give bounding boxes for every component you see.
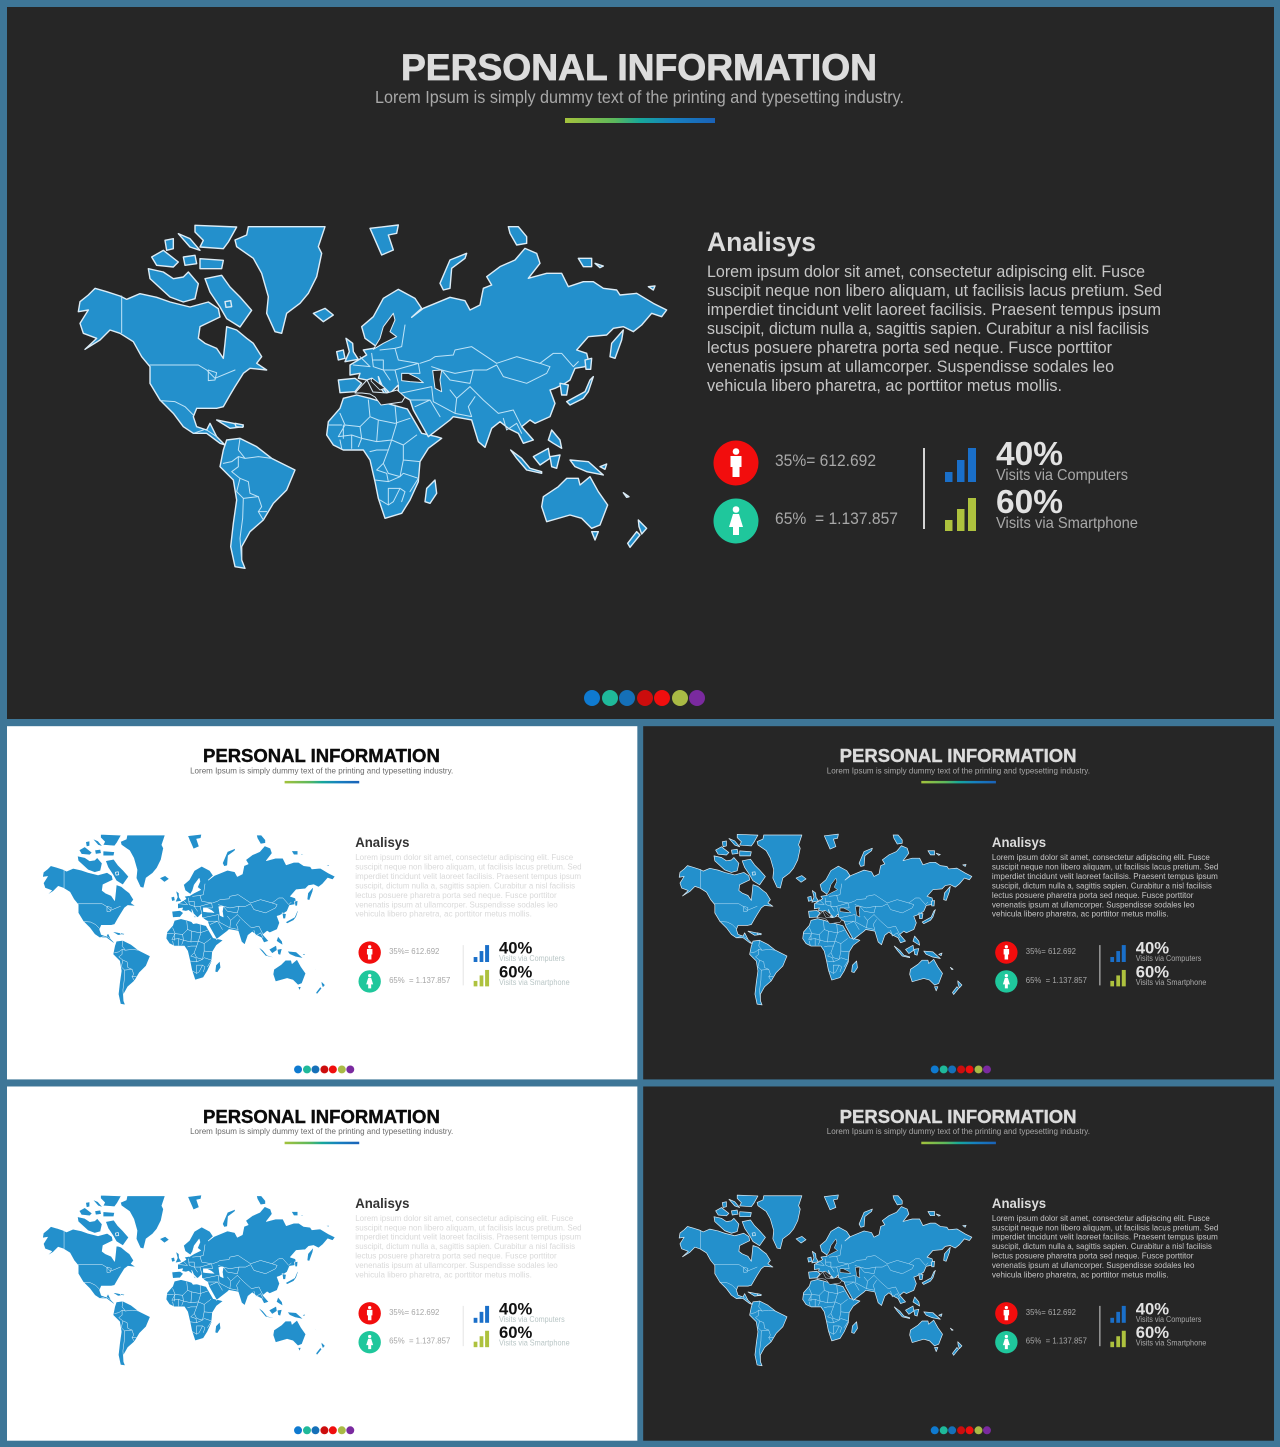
text block: analysis paragraph [355,1213,582,1280]
text block: analysis paragraph: venenatis ipsum at ullamcorper. Suspendisse sodales leo [707,357,1114,376]
text block: analysis paragraph: lectus posuere pharetra porta sed neque. Fusce porttitor [355,890,557,900]
icon: male in red circle [358,1302,381,1325]
stat: 60 percent: 60% [996,483,1063,520]
pagination dots [931,1065,991,1073]
stat: 40 percent: 40% [1136,940,1169,958]
title accent rule [921,781,996,783]
label: computers: Visits via Computers [1136,954,1201,963]
panel: main dark slide [7,7,1274,719]
heading: Analisys: Analisys [992,1196,1046,1211]
subtitle: Lorem Ipsum is simply dummy text of the printing and typesetting industry. [827,765,1090,775]
label: smartphone: Visits via Smartphone [499,1339,570,1348]
stat: male count: 35%= 612.692 [389,946,440,956]
title: PERSONAL INFORMATION [840,745,1077,766]
text block: analysis paragraph: Lorem ipsum dolor sit amet, consectetur adipiscing elit. Fusce [992,1213,1210,1223]
icon: female in green circle [358,1331,381,1353]
stat: female count: 65% = 1.137.857 [1026,975,1087,985]
stat: male count: 35%= 612.692 [1026,1307,1076,1317]
divider [462,945,465,985]
text block: analysis paragraph: suscipit, dictum nulla a, sagittis sapien. Curabitur a nisl facilisis [355,1241,575,1251]
text block: analysis paragraph: vehicula libero pharetra, ac porttitor metus mollis. [992,909,1169,919]
world map [42,1195,335,1366]
label: smartphone: Visits via Smartphone [1136,1339,1207,1348]
text block: analysis paragraph: suscipit neque non libero aliquam, ut facilisis lacus pretium. Sed [355,861,582,871]
panel: light slide top [7,726,637,1079]
heading: Analisys: Analisys [355,835,409,850]
text block: analysis paragraph [355,852,582,919]
stat: male count: 35%= 612.692 [1026,946,1076,956]
title accent rule [285,1142,359,1144]
text block: analysis paragraph: suscipit, dictum nulla a, sagittis sapien. Curabitur a nisl facilisis [992,1241,1212,1251]
pagination dots [294,1426,354,1434]
text block: analysis paragraph: lectus posuere pharetra porta sed neque. Fusce porttitor [992,1251,1194,1261]
panel: dark slide top [643,726,1274,1079]
title: PERSONAL INFORMATION [203,745,440,766]
divider [1098,945,1101,985]
stat: female count: 65% = 1.137.857 [775,509,898,528]
text block: analysis paragraph: Lorem ipsum dolor sit amet, consectetur adipiscing elit. Fusce [355,852,573,862]
subtitle: Lorem Ipsum is simply dummy text of the printing and typesetting industry. [375,87,904,107]
text block: analysis paragraph: vehicula libero pharetra, ac porttitor metus mollis. [355,909,532,919]
stat: 60 percent: 60% [499,963,533,981]
stat: male count: 35%= 612.692 [389,1307,440,1317]
icon: blue bars [1110,945,1126,962]
stat: male count: 35%= 612.692 [775,451,876,470]
text block: analysis paragraph: venenatis ipsum at ullamcorper. Suspendisse sodales leo [355,899,558,909]
text block: analysis paragraph: imperdiet tincidunt velit laoreet facilisis. Praesent tempus ipsum [992,871,1218,881]
text block: analysis paragraph: Lorem ipsum dolor sit amet, consectetur adipiscing elit. Fusce [992,852,1210,862]
text block: analysis paragraph: imperdiet tincidunt velit laoreet facilisis. Praesent tempus ipsum [992,1232,1218,1242]
stat: female count: 65% = 1.137.857 [389,975,451,985]
text block: analysis paragraph: Lorem ipsum dolor sit amet, consectetur adipiscing elit. Fusce [355,1213,573,1223]
text block: analysis paragraph: vehicula libero pharetra, ac porttitor metus mollis. [707,376,1062,395]
text block: analysis paragraph: imperdiet tincidunt velit laoreet facilisis. Praesent tempus ipsum [707,300,1161,319]
text block: analysis paragraph: venenatis ipsum at ullamcorper. Suspendisse sodales leo [992,899,1195,909]
divider [462,1306,465,1346]
stat: 40 percent: 40% [1136,1300,1169,1318]
world map [78,225,667,568]
title: PERSONAL INFORMATION [840,1106,1077,1127]
title accent rule [285,781,359,783]
text block: analysis paragraph: lectus posuere pharetra porta sed neque. Fusce porttitor [707,338,1112,357]
text block: analysis paragraph: suscipit neque non libero aliquam, ut facilisis lacus pretium. Sed [707,281,1162,300]
stat: 60 percent: 60% [1136,963,1169,981]
title accent rule [921,1142,996,1144]
title: PERSONAL INFORMATION [203,1106,440,1127]
stat: 60 percent: 60% [499,1324,533,1342]
heading: Analisys: Analisys [707,227,816,257]
title: PERSONAL INFORMATION [401,47,877,88]
stat: 40 percent: 40% [499,1300,533,1318]
icon: green bars [474,970,489,986]
text block: analysis paragraph: venenatis ipsum at ullamcorper. Suspendisse sodales leo [355,1260,558,1270]
text block: analysis paragraph [707,262,1162,395]
text block: analysis paragraph: suscipit, dictum nulla a, sagittis sapien. Curabitur a nisl facilisis [992,880,1212,890]
label: computers: Visits via Computers [499,954,565,963]
subtitle: Lorem Ipsum is simply dummy text of the printing and typesetting industry. [190,1126,453,1136]
text block: analysis paragraph: suscipit neque non libero aliquam, ut facilisis lacus pretium. Sed [992,861,1219,871]
text block: analysis paragraph: vehicula libero pharetra, ac porttitor metus mollis. [992,1270,1169,1280]
text block: analysis paragraph: imperdiet tincidunt velit laoreet facilisis. Praesent tempus ipsum [355,871,581,881]
icon: blue bars [474,1306,489,1323]
icon: male in red circle [358,941,381,964]
subtitle: Lorem Ipsum is simply dummy text of the printing and typesetting industry. [190,765,453,775]
text block: analysis paragraph: imperdiet tincidunt velit laoreet facilisis. Praesent tempus ipsum [355,1232,581,1242]
text block: analysis paragraph [992,1213,1219,1280]
label: smartphone: Visits via Smartphone [499,978,570,987]
stat: female count: 65% = 1.137.857 [1026,1336,1087,1346]
text block: analysis paragraph: lectus posuere pharetra porta sed neque. Fusce porttitor [992,890,1194,900]
icon: green bars [1110,970,1126,986]
icon: blue bars [474,945,489,962]
divider [923,448,925,529]
stat: 40 percent: 40% [996,435,1063,472]
label: smartphone: Visits via Smartphone [1136,978,1207,987]
world map [42,834,335,1005]
icon: green bars [474,1331,489,1347]
icon: male in red circle [995,941,1018,964]
subtitle: Lorem Ipsum is simply dummy text of the printing and typesetting industry. [827,1126,1090,1136]
world map [679,834,972,1005]
text block: analysis paragraph: suscipit neque non libero aliquam, ut facilisis lacus pretium. Sed [992,1222,1219,1232]
text block: analysis paragraph: venenatis ipsum at ullamcorper. Suspendisse sodales leo [992,1260,1195,1270]
text block: analysis paragraph: suscipit, dictum nulla a, sagittis sapien. Curabitur a nisl facilisis [707,319,1149,338]
icon: female in green circle [995,1331,1018,1353]
label: computers: Visits via Computers [996,467,1128,484]
text block: analysis paragraph: Lorem ipsum dolor sit amet, consectetur adipiscing elit. Fusce [707,262,1145,281]
pagination dots [294,1065,354,1073]
text block: analysis paragraph [992,852,1219,919]
title accent rule [565,118,715,123]
icon: female in green circle [358,970,381,993]
panel: dark slide bottom [643,1086,1274,1441]
text block: analysis paragraph: vehicula libero pharetra, ac porttitor metus mollis. [355,1270,532,1280]
label: computers: Visits via Computers [499,1315,565,1324]
divider [1098,1306,1101,1346]
text block: analysis paragraph: suscipit neque non libero aliquam, ut facilisis lacus pretium. Sed [355,1222,582,1232]
panel: light slide bottom [7,1086,637,1441]
label: smartphone: Visits via Smartphone [996,515,1138,532]
stat: female count: 65% = 1.137.857 [389,1336,451,1346]
label: computers: Visits via Computers [1136,1315,1201,1324]
icon: female in green circle [995,970,1018,993]
text block: analysis paragraph: suscipit, dictum nulla a, sagittis sapien. Curabitur a nisl facilisis [355,880,575,890]
icon: green bars [945,498,976,531]
icon: female in green circle [714,498,758,544]
icon: green bars [1110,1331,1126,1347]
icon: male in red circle [995,1302,1018,1325]
stat: 60 percent: 60% [1136,1324,1169,1342]
icon: blue bars [1110,1306,1126,1323]
heading: Analisys: Analisys [992,835,1046,850]
world map [679,1195,972,1366]
pagination dots [584,690,705,706]
text block: analysis paragraph: lectus posuere pharetra porta sed neque. Fusce porttitor [355,1251,557,1261]
icon: blue bars [945,448,976,482]
icon: male in red circle [714,440,758,486]
stat: 40 percent: 40% [499,940,533,958]
heading: Analisys: Analisys [355,1196,409,1211]
pagination dots [931,1426,991,1434]
